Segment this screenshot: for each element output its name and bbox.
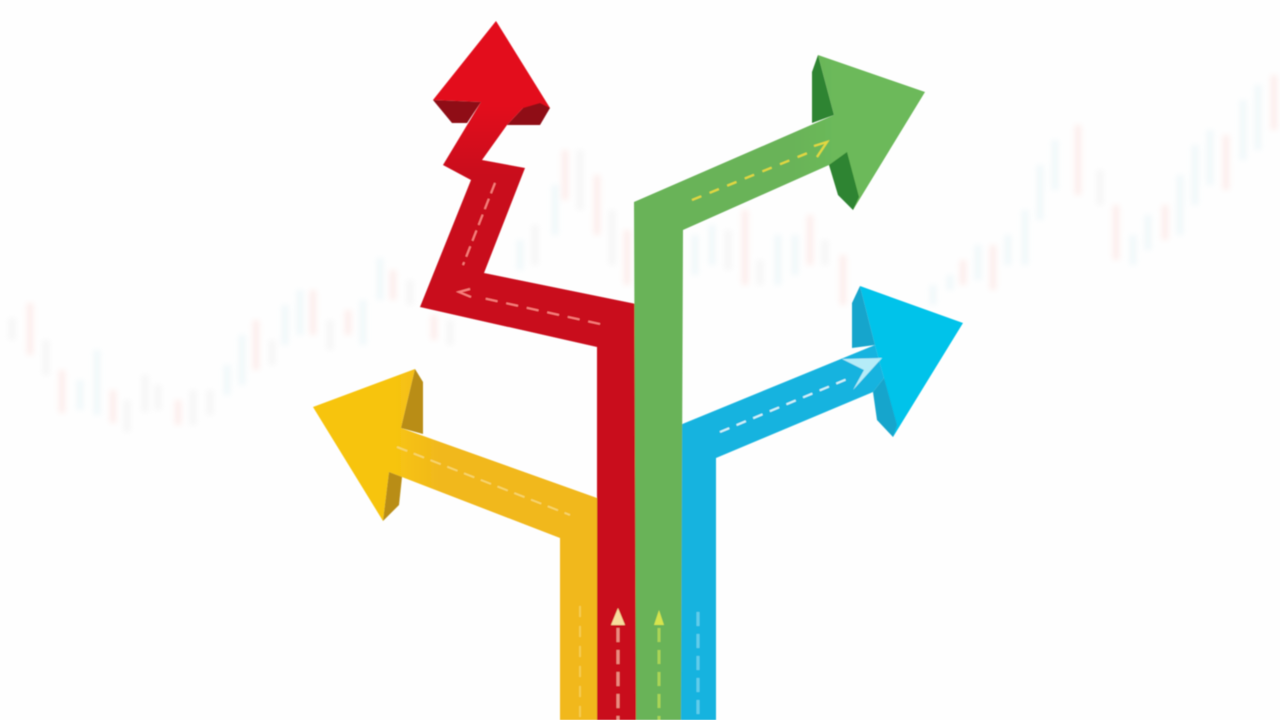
cyan arrow shaft: [678, 345, 884, 720]
red arrow face and shaft: [420, 21, 636, 720]
green arrow face and shaft: [634, 55, 925, 720]
background: faint candlestick chart: [12, 75, 1274, 432]
green vertical lane arrowhead: [654, 610, 664, 625]
yellow arrow face and shaft: [313, 369, 597, 720]
cyan dashed lane line: [698, 377, 852, 720]
cyan arrow head side shading: [852, 286, 897, 437]
green arrow head side shading: [812, 55, 859, 210]
yellow dashed lane line: [397, 447, 580, 720]
cyan lane arrowhead: [842, 358, 882, 390]
green dashed lane line: [659, 142, 827, 720]
red arrow head side shading: [433, 100, 550, 125]
arrow: green pointing right: [634, 55, 925, 720]
arrows group: [313, 21, 963, 720]
red dashed lane line: [459, 183, 618, 720]
arrow: cyan pointing right: [678, 286, 963, 720]
arrow: red zigzag pointing up: [420, 21, 636, 720]
cyan arrow head: [860, 286, 963, 437]
yellow arrow head side shading: [383, 369, 423, 521]
red vertical lane arrowhead: [611, 608, 625, 625]
arrow: yellow pointing left: [313, 369, 597, 720]
